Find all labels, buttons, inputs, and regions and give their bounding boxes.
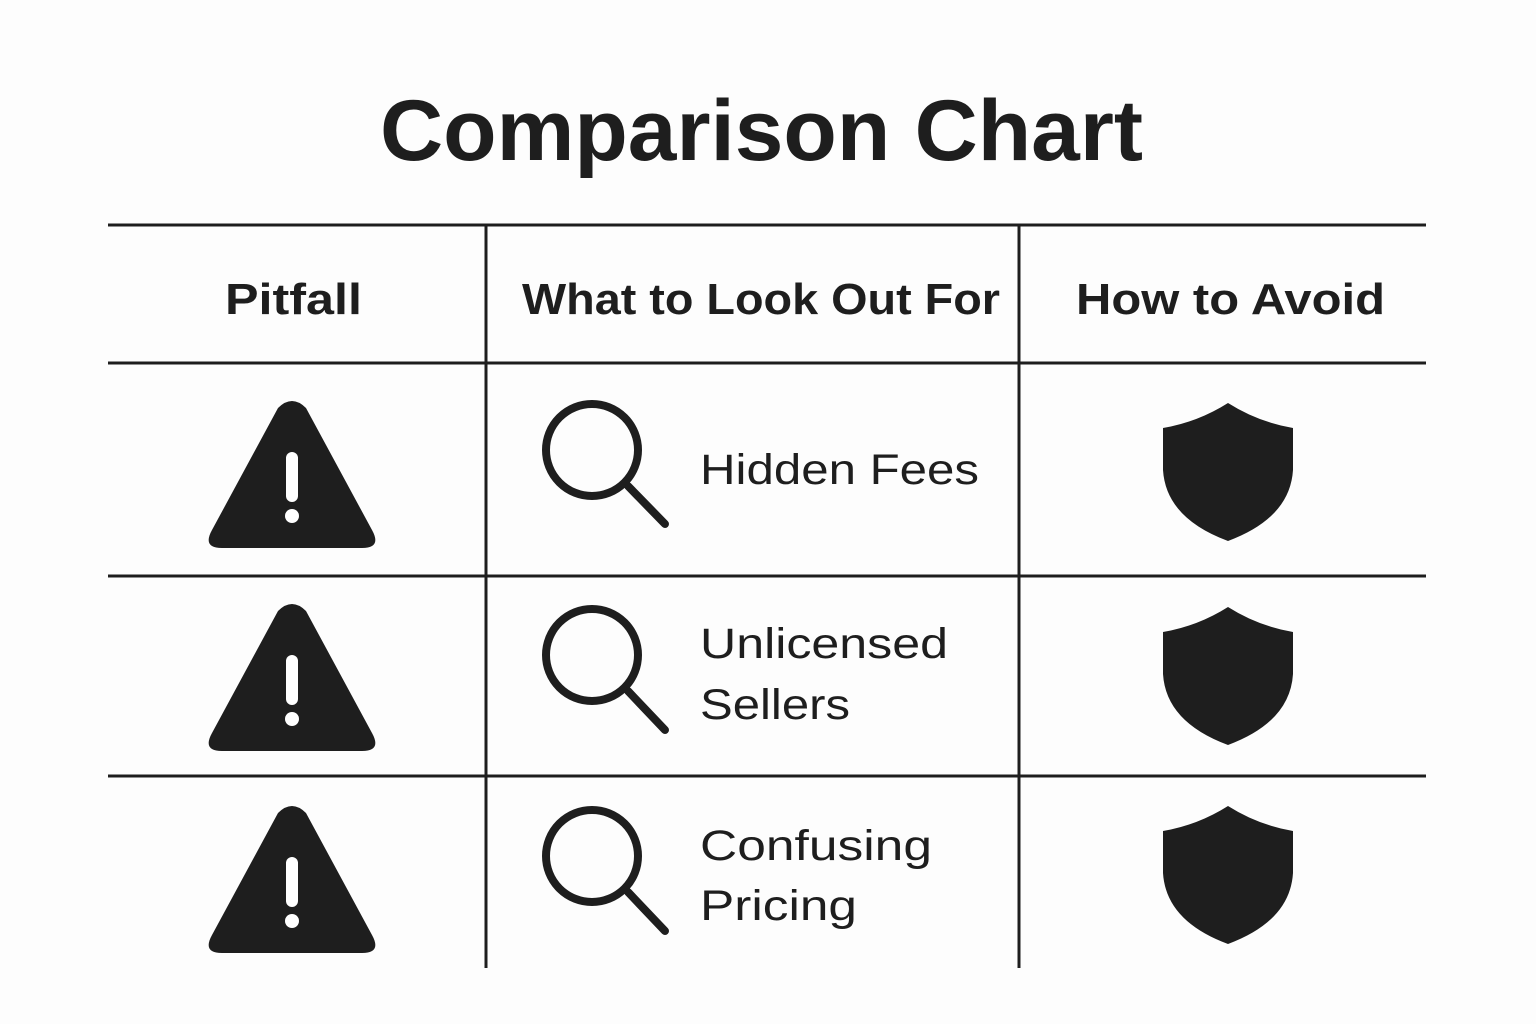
icon: shield bbox=[1163, 607, 1293, 745]
icon: magnifier bbox=[546, 404, 665, 524]
icon: warning triangle bbox=[209, 401, 375, 548]
icon: shield bbox=[1163, 806, 1293, 944]
icon: magnifier bbox=[546, 810, 665, 931]
row 2 bbox=[209, 604, 1293, 751]
text: Confusing Pricing: Pricing bbox=[700, 882, 857, 930]
table grid bbox=[108, 225, 1426, 968]
icon: warning triangle bbox=[209, 806, 375, 953]
text: Unlicensed Sellers: Unlicensed bbox=[700, 620, 948, 668]
icon: magnifier bbox=[546, 609, 665, 730]
text: Confusing Pricing: Confusing bbox=[700, 822, 932, 870]
text: Unlicensed Sellers: Sellers bbox=[700, 681, 850, 729]
header: Pitfall: Pitfall bbox=[225, 275, 362, 324]
row 3 bbox=[209, 806, 1293, 953]
header: What to Look Out For: What to Look Out For bbox=[522, 275, 1000, 324]
icon: shield bbox=[1163, 403, 1293, 541]
icon: warning triangle bbox=[209, 604, 375, 751]
text: Confusing Pricing bbox=[700, 822, 932, 930]
title: Comparison Chart bbox=[380, 83, 1143, 179]
text: Hidden Fees: Hidden Fees bbox=[700, 446, 979, 494]
row 1 bbox=[209, 401, 1293, 548]
text: Unlicensed Sellers bbox=[700, 620, 948, 729]
header: How to Avoid: How to Avoid bbox=[1076, 275, 1385, 324]
